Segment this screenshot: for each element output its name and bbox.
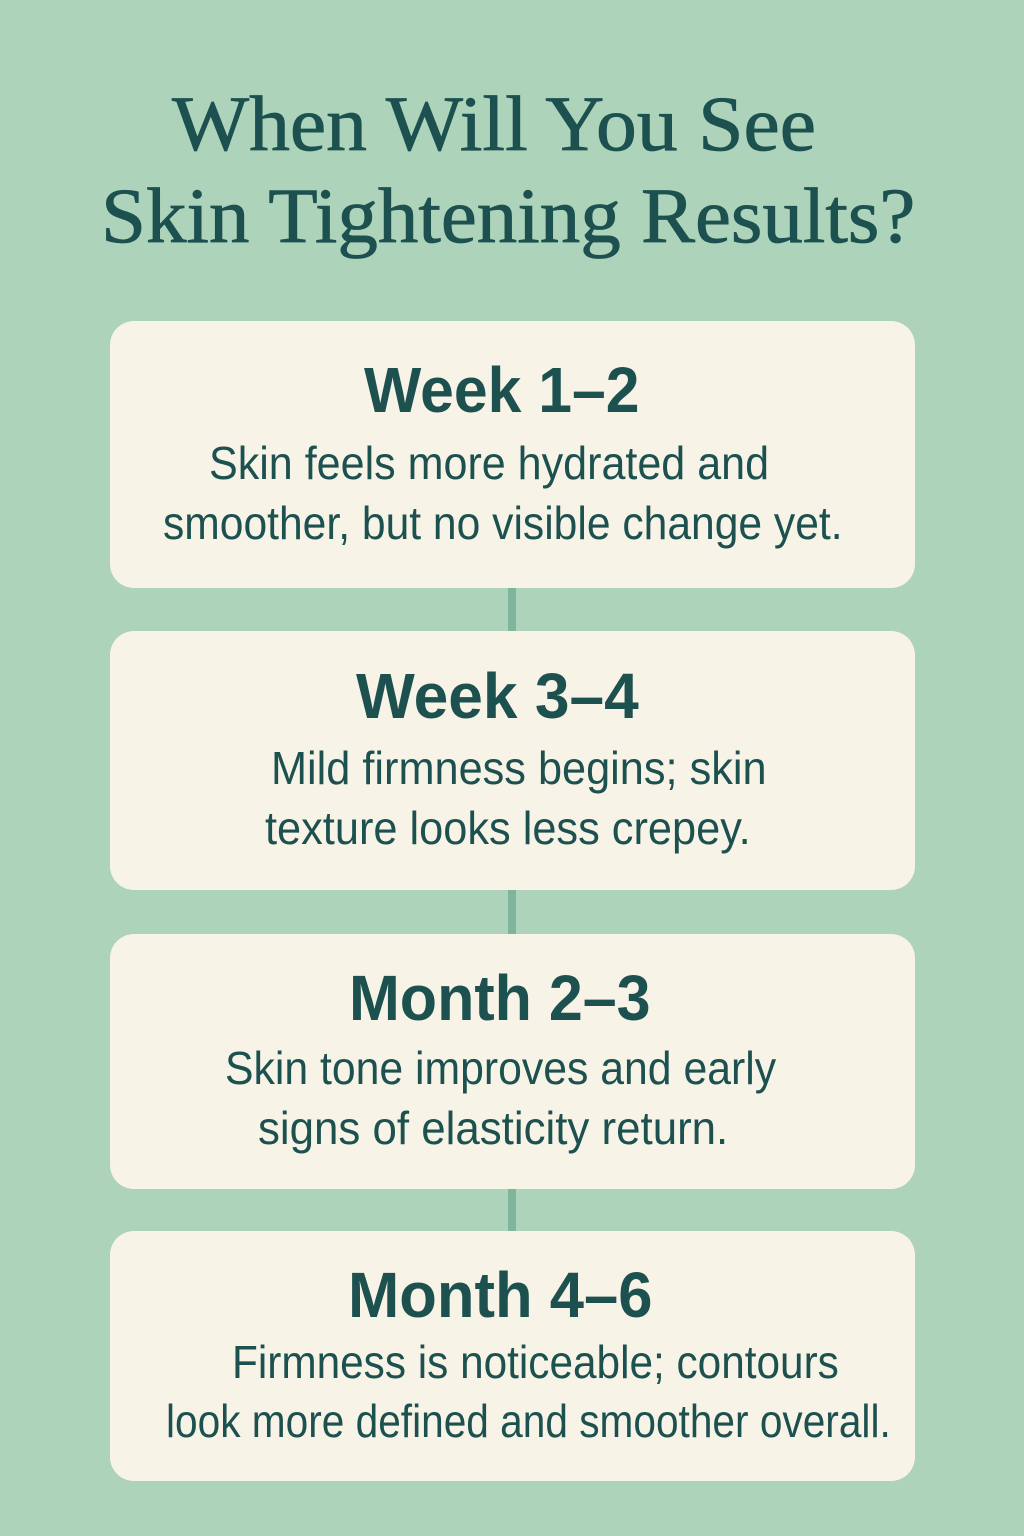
text: month 2-3 description: signs of elasticity return. [258, 1102, 728, 1154]
heading: week 1-2: Week 1–2 [364, 354, 639, 426]
text: week 3-4 description [265, 742, 767, 854]
text: week 1-2 description [163, 437, 843, 549]
panel: week 3-4 [110, 631, 915, 890]
text: month 2-3 description: Skin tone improves and early [225, 1042, 776, 1094]
text: week 3-4 description: texture looks less crepey. [265, 802, 751, 854]
heading: month 4-6: Month 4–6 [348, 1259, 652, 1331]
connector: week 3-4 to month 2-3 [508, 888, 516, 935]
text: week 1-2 description: Skin feels more hydrated and [209, 437, 769, 489]
title: When Will You See [172, 80, 816, 167]
text: month 4-6 description: look more defined and smoother overall. [166, 1395, 891, 1447]
text: month 2-3 description [225, 1042, 776, 1154]
panel: month 4-6 [110, 1231, 915, 1481]
panel: month 2-3 [110, 934, 915, 1189]
title [101, 80, 915, 259]
text: month 4-6 description: Firmness is noticeable; contours [232, 1336, 839, 1388]
connector: month 2-3 to month 4-6 [508, 1187, 516, 1233]
text: month 4-6 description [166, 1336, 891, 1447]
heading: month 2-3: Month 2–3 [349, 962, 651, 1034]
title: Skin Tightening Results? [101, 172, 915, 259]
panel: week 1-2 [110, 321, 915, 588]
text: week 3-4 description: Mild firmness begins; skin [271, 742, 767, 794]
heading: week 3-4: Week 3–4 [356, 660, 639, 732]
connector: week 1-2 to week 3-4 [508, 586, 516, 632]
text: week 1-2 description: smoother, but no visible change yet. [163, 497, 843, 549]
